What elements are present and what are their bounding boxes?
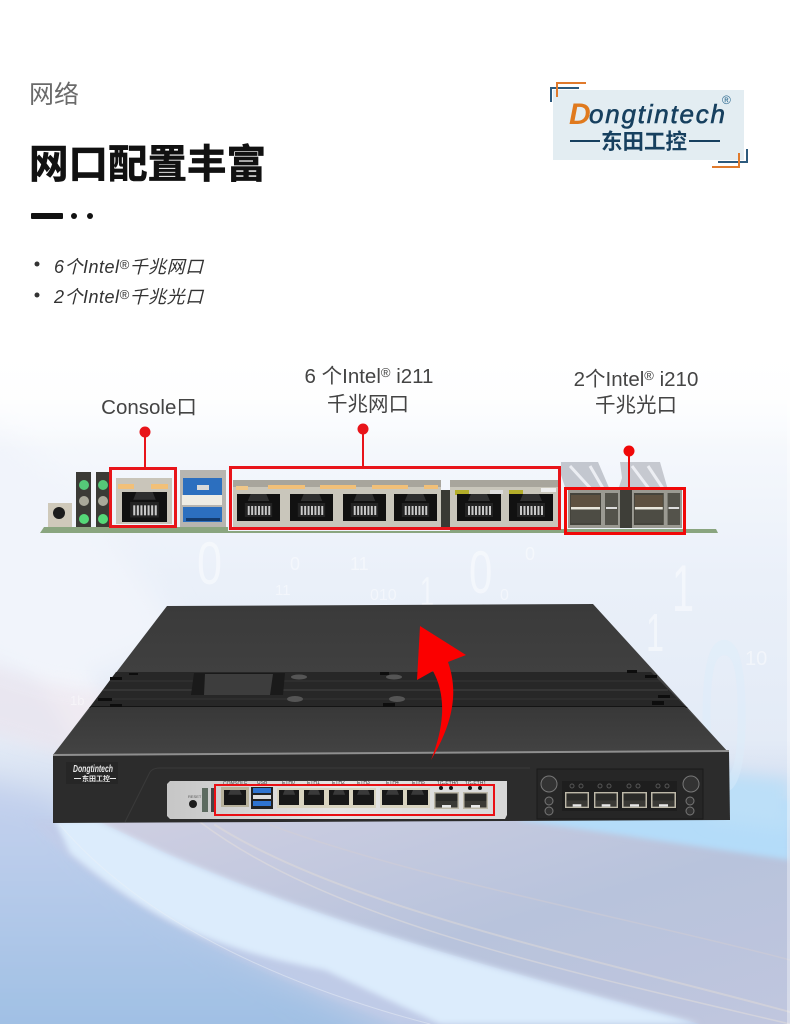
callout label: i210 [574,368,698,417]
silver IO panel [167,780,507,819]
lower cover [53,707,728,755]
red highlight: console [110,426,176,526]
background binary digits: 11 [350,554,369,574]
silver IO panel: RESET [188,794,202,799]
silver IO panel: ETH2 [332,780,345,786]
RJ45 group two [441,480,559,527]
callout label: i210: 千兆光口 [595,394,677,417]
callout label: Console: Console口 [101,396,197,419]
device chassis [53,604,730,823]
feature list: 千兆网口 [130,257,205,277]
logo: ® [722,93,731,107]
callout label: i211: i211 [391,365,433,388]
silver IO panel: ETH4 [386,780,399,786]
callout label: i211: 千兆网口 [327,393,409,416]
background binary digits: 0 [525,544,535,564]
logo: ongtintech [589,99,725,129]
silver IO panel: ETH1 [307,780,320,786]
red highlight: i210 [566,446,684,534]
feature list: ® [120,257,130,272]
console and USB [221,787,249,807]
front logo: 东田工控 [82,774,110,783]
red curved arrow [417,626,466,760]
callout label: i210: 2个Intel [574,368,644,391]
feature list: 千兆光口 [130,287,205,307]
callout label: i211 [305,365,433,416]
feature list: 6个Intel [54,257,120,277]
background binary digits: 1 [420,570,434,616]
board rear IO [40,462,718,533]
logo: D [569,98,591,131]
red highlight: i211 [230,424,560,528]
silver IO panel: ETH0 [282,780,295,786]
callout label: i210: ® [644,368,654,383]
feature list [34,257,205,307]
background binary digits: 1b [70,693,84,708]
front logo: Dongtintech [73,764,113,775]
background binary digits: 0 [290,554,300,574]
silver IO panel: ETH5 [412,780,425,786]
background binary digits: 0 [699,596,749,836]
main heading: 网口配置丰富 [29,143,266,187]
background binary digits: 0 [500,587,509,604]
silver IO panel: ETH3 [357,780,370,786]
front face [53,751,730,823]
section label: 网络 [29,81,79,109]
PCB strip [40,527,718,533]
feature list: ® [120,287,130,302]
silver IO panel: 1G-ETH0 [437,781,458,787]
ETH ports [277,788,376,808]
callout label: i210: i210 [654,368,698,391]
background binary digits: 1 [646,604,664,663]
background binary digits [70,531,767,836]
SFP modules [561,462,682,528]
console port [116,478,172,524]
SFP ports [434,792,459,809]
callout label: i211: 6 个Intel [305,365,381,388]
reset button [48,503,72,527]
background binary digits: 0 [197,531,222,598]
background binary digits: 10 [745,648,767,670]
feature list: 2个Intel [54,287,120,307]
USB ports [180,470,226,527]
background binary digits: 010 [370,587,397,604]
top cover [53,604,728,755]
RJ45 group one [233,480,441,527]
silver IO panel: 1G-ETH1 [465,781,486,787]
front logo [66,762,118,784]
background binary digits: 1 [672,552,694,626]
silver IO panel: USB [257,780,268,786]
heatsink band [89,670,688,708]
LED stacks [76,472,110,527]
SFP expansion module [537,769,703,819]
silver IO panel: CONSOLE [223,781,248,787]
background binary digits: 0 [469,539,492,606]
logo [551,83,747,167]
heading accent marks [31,213,93,219]
logo: 东田工控 [601,129,687,154]
background binary digits: 11 [275,582,291,599]
callout label: i211: ® [381,365,391,380]
